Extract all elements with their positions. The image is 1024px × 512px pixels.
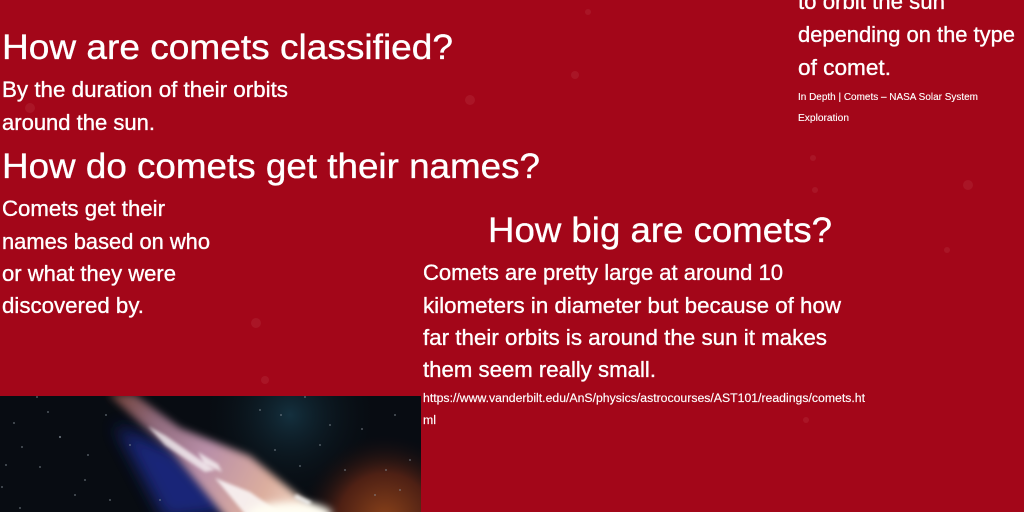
source link: nasa: In Depth | Comets – NASA Solar System — [798, 92, 978, 103]
heading: how are comets classified: How are comets classified? — [2, 28, 453, 67]
text block: classification answer: By the duration of their orbits — [2, 77, 288, 102]
source link: vanderbilt: ml — [423, 415, 436, 427]
text block: classification answer: around the sun. — [2, 110, 155, 135]
text block: size answer: Comets are pretty large at around 10 — [423, 260, 783, 285]
heading: how do comets get their names: How do comets get their names? — [2, 147, 540, 186]
text block: naming answer: names based on who — [2, 229, 210, 254]
text block: orbit duration: depending on the type — [798, 22, 1015, 47]
source link: nasa — [798, 92, 978, 124]
text block: naming answer: Comets get their — [2, 196, 165, 221]
text block: size answer: kilometers in diameter but because of how — [423, 293, 841, 318]
text block: orbit duration: of comet. — [798, 55, 891, 80]
source link: nasa: Exploration — [798, 113, 849, 124]
text block: naming answer — [2, 196, 210, 318]
source link: vanderbilt — [423, 393, 866, 427]
text block: naming answer: discovered by. — [2, 293, 144, 318]
text block: naming answer: or what they were — [2, 261, 176, 286]
text block: classification answer — [2, 77, 288, 135]
text block: size answer: far their orbits is around the sun it makes — [423, 325, 827, 350]
text block: size answer — [423, 260, 841, 382]
source link: vanderbilt: https://www.vanderbilt.edu/AnS/physics/astrocourses/AST101/readings/comets.ht — [423, 393, 866, 405]
heading: how big are comets: How big are comets? — [488, 211, 832, 250]
photo: comet in starry sky — [0, 394, 421, 512]
text block: size answer: them seem really small. — [423, 357, 656, 382]
text block: orbit duration — [798, 0, 1015, 80]
